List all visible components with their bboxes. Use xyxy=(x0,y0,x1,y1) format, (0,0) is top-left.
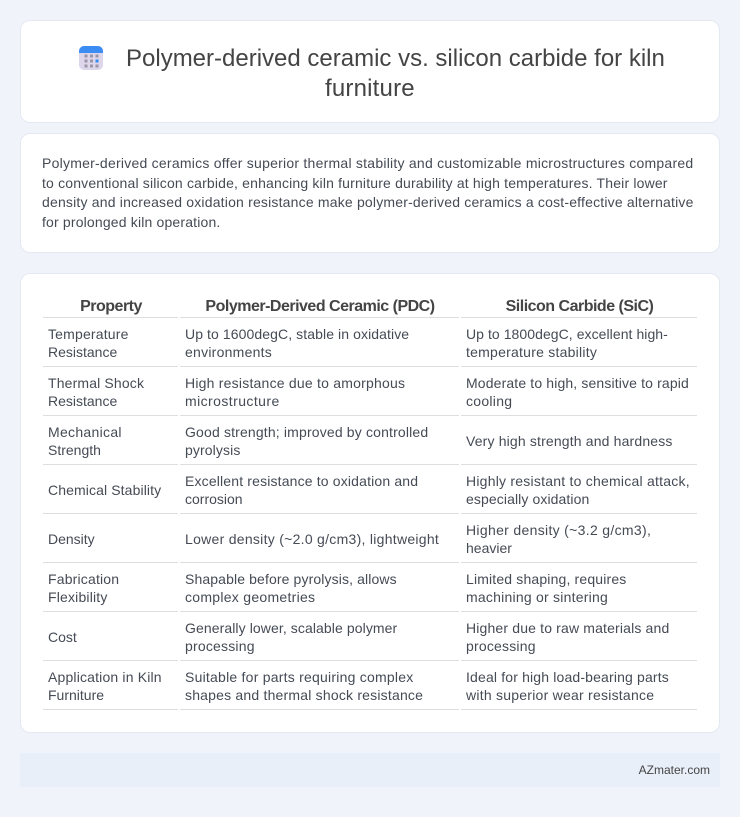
icon: calendar xyxy=(79,46,103,70)
row: mechanical strength: Mechanical xyxy=(48,424,122,440)
row: thermal shock resistance: Resistance xyxy=(48,393,117,409)
row: application in kiln furniture: Furniture xyxy=(48,687,104,703)
footer text: AZmater.com xyxy=(639,763,710,777)
row: mechanical strength: Strength xyxy=(48,442,101,458)
row: application in kiln furniture: Suitable for parts requiring complex xyxy=(185,669,414,685)
row: fabrication flexibility: Limited shaping, requires xyxy=(466,571,626,587)
row: cost: processing xyxy=(466,638,536,654)
row: temperature resistance: Resistance xyxy=(48,344,117,360)
comparison table card xyxy=(20,273,720,733)
row: chemical stability xyxy=(48,473,690,507)
intro text: density and increased oxidation resistance make polymer-derived ceramics a cost-effective alternative xyxy=(42,194,694,210)
row: fabrication flexibility: complex geometries xyxy=(185,589,315,605)
row: density: heavier xyxy=(466,540,512,556)
row: fabrication flexibility: machining or sintering xyxy=(466,589,608,605)
title: Polymer-derived ceramic vs. silicon carbide for kiln xyxy=(126,45,665,72)
table header xyxy=(80,298,653,315)
row: cost: Cost xyxy=(48,629,77,645)
row: fabrication flexibility: Shapable before pyrolysis, allows xyxy=(185,571,397,587)
row: application in kiln furniture: Application in Kiln xyxy=(48,669,162,685)
row: cost xyxy=(48,620,669,654)
row: temperature resistance: Up to 1800degC, excellent high- xyxy=(466,326,668,342)
row: mechanical strength: Good strength; improved by controlled xyxy=(185,424,428,440)
row: chemical stability: especially oxidation xyxy=(466,491,589,507)
table header: Polymer-Derived Ceramic (PDC) xyxy=(205,298,435,315)
row: fabrication flexibility: Flexibility xyxy=(48,589,108,605)
row: chemical stability: Excellent resistance to oxidation and xyxy=(185,473,418,489)
table header: Silicon Carbide (SiC) xyxy=(506,298,653,315)
row: temperature resistance: temperature stability xyxy=(466,344,597,360)
row: temperature resistance: Up to 1600degC, stable in oxidative xyxy=(185,326,409,342)
row: temperature resistance xyxy=(48,326,668,360)
row: temperature resistance: environments xyxy=(185,344,272,360)
row: application in kiln furniture xyxy=(48,669,669,703)
row: chemical stability: Highly resistant to chemical attack, xyxy=(466,473,690,489)
row: thermal shock resistance: Thermal Shock xyxy=(48,375,144,391)
title card xyxy=(20,20,720,123)
row: application in kiln furniture: shapes and thermal shock resistance xyxy=(185,687,423,703)
row: thermal shock resistance: microstructure xyxy=(185,393,280,409)
row: density xyxy=(48,522,651,556)
row: density: Higher density (~3.2 g/cm3), xyxy=(466,522,651,538)
intro card xyxy=(20,133,720,253)
title: furniture xyxy=(325,75,415,102)
row: chemical stability: corrosion xyxy=(185,491,243,507)
row: mechanical strength: Very high strength and hardness xyxy=(466,433,673,449)
row: thermal shock resistance: High resistance due to amorphous xyxy=(185,375,405,391)
intro text: for prolonged kiln operation. xyxy=(42,214,220,230)
title xyxy=(126,45,665,102)
row: application in kiln furniture: with superior wear resistance xyxy=(466,687,654,703)
row: fabrication flexibility: Fabrication xyxy=(48,571,119,587)
row: thermal shock resistance: Moderate to high, sensitive to rapid xyxy=(466,375,689,391)
row: application in kiln furniture: Ideal for high load-bearing parts xyxy=(466,669,669,685)
row: density: Density xyxy=(48,531,95,547)
row: chemical stability: Chemical Stability xyxy=(48,482,161,498)
row: temperature resistance: Temperature xyxy=(48,326,129,342)
row: cost: Higher due to raw materials and xyxy=(466,620,669,636)
row: cost: processing xyxy=(185,638,255,654)
row: thermal shock resistance: cooling xyxy=(466,393,512,409)
intro text xyxy=(42,155,694,230)
row: fabrication flexibility xyxy=(48,571,626,605)
row: cost: Generally lower, scalable polymer xyxy=(185,620,397,636)
row: mechanical strength: pyrolysis xyxy=(185,442,240,458)
row: mechanical strength xyxy=(48,424,673,458)
row: density: Lower density (~2.0 g/cm3), lightweight xyxy=(185,531,439,547)
table header: Property xyxy=(80,298,142,315)
intro text: to conventional silicon carbide, enhancing kiln furniture durability at high temperatures. Their lower xyxy=(42,174,668,190)
footer bar xyxy=(20,753,720,787)
row: thermal shock resistance xyxy=(48,375,689,409)
intro text: Polymer-derived ceramics offer superior thermal stability and customizable microstructures compared xyxy=(42,155,693,171)
